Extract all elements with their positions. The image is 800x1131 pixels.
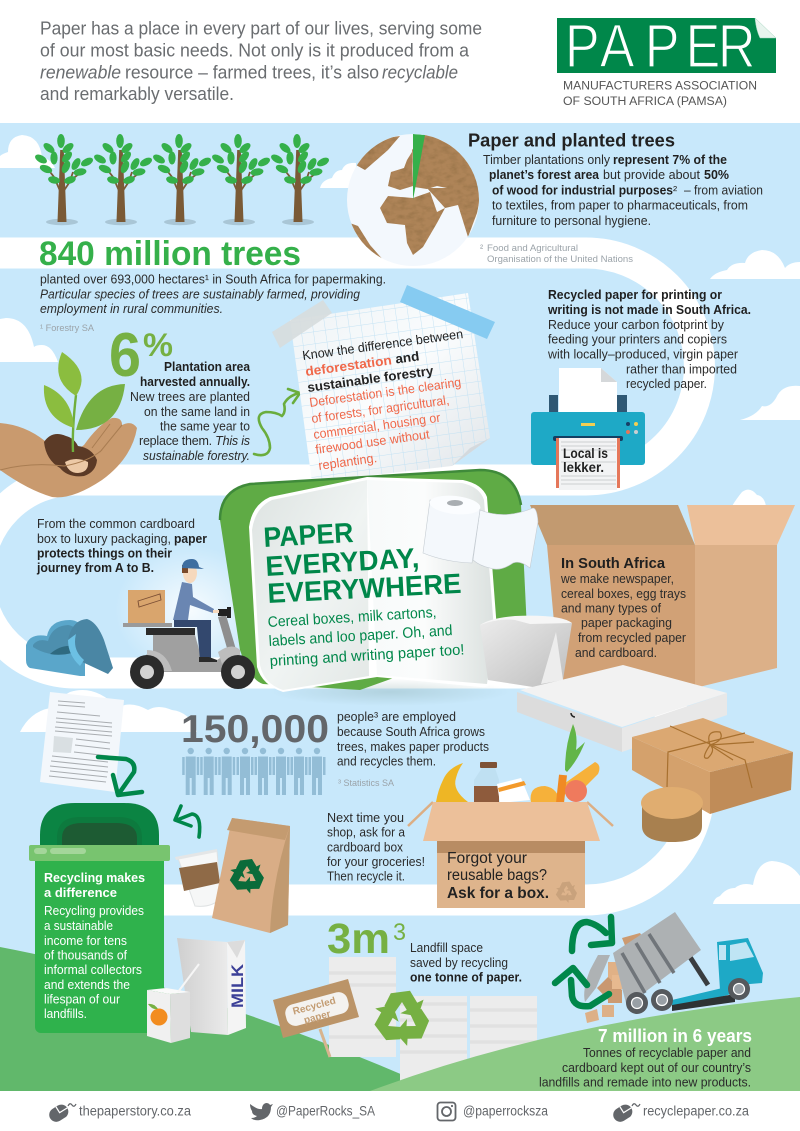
icon: paper bag bbox=[212, 818, 290, 933]
text: recycling makes a difference: a difference bbox=[44, 885, 117, 900]
intro text: of our most basic needs. Not only is it produced from a bbox=[40, 40, 470, 60]
parcel bbox=[128, 590, 165, 623]
text: people employed bbox=[337, 710, 489, 768]
heading: paper everyday everywhere: EVERYWHERE bbox=[267, 568, 462, 609]
text: recycling makes a difference: landfills. bbox=[44, 1007, 87, 1021]
text: landfill space: one tonne of paper. bbox=[410, 970, 522, 984]
icon: document bbox=[40, 692, 124, 792]
text: recycled paper for printing: with locally–produced, virgin paper bbox=[547, 348, 738, 362]
text: know the difference: replanting. bbox=[317, 450, 378, 473]
text: planted hectares bbox=[40, 272, 386, 316]
hill: right bbox=[370, 997, 800, 1091]
hill: left bbox=[0, 947, 440, 1091]
text: recycling makes a difference: informal collectors bbox=[44, 963, 142, 977]
icon: recycled paper sign: Recycled bbox=[292, 996, 337, 1018]
text: plantation area: harvested annually. bbox=[140, 375, 250, 389]
footer: twitter bbox=[250, 1103, 375, 1120]
text: tonnes of recyclable paper: Tonnes of recyclable paper and bbox=[583, 1046, 751, 1060]
white winding road bbox=[0, 253, 699, 900]
stat: 6 percent bbox=[109, 321, 173, 390]
text: next time you shop bbox=[327, 811, 425, 884]
stat: 6 percent: % bbox=[143, 327, 173, 363]
text: cereal boxes: labels and loo paper. Oh, and bbox=[268, 622, 453, 650]
intro text: recyclable bbox=[382, 62, 458, 82]
text: recycling makes a difference: income for tens bbox=[44, 934, 127, 948]
globe bbox=[347, 132, 482, 266]
text: recycling makes a difference: Recycling makes bbox=[44, 870, 145, 885]
text: in south africa: paper packaging bbox=[581, 616, 672, 630]
tree row bbox=[34, 134, 330, 225]
text: common cardboard box: From the common cardboard bbox=[37, 517, 195, 531]
text: next time you shop: shop, ask for a bbox=[327, 826, 405, 840]
text: planted hectares: Particular species of trees are sustainably farmed, providing bbox=[40, 288, 360, 302]
text: next time you shop: for your groceries! bbox=[327, 855, 425, 869]
text: landfill space: saved by recycling bbox=[410, 956, 508, 970]
text: planted hectares: planted over 693,000 hectares¹ in South Africa for papermaking. bbox=[40, 272, 386, 286]
text: timber plantations: planet’s forest area bbox=[489, 168, 600, 182]
text: forgot your bags: reusable bags? bbox=[447, 867, 547, 884]
text: planted hectares: employment in rural communities. bbox=[40, 302, 223, 316]
text: tonnes of recyclable paper: cardboard kept out of our country’s bbox=[562, 1061, 751, 1075]
footer: instagram: @paperrocksza bbox=[463, 1104, 548, 1118]
icon: people row bbox=[182, 748, 326, 795]
text: local is lekker bbox=[563, 445, 608, 475]
footer: website two: recyclepaper.co.za bbox=[643, 1104, 749, 1118]
logo: PAMSA: PAPER bbox=[565, 12, 755, 80]
text: know the difference: and bbox=[394, 348, 420, 366]
logo: PAMSA: OF SOUTH AFRICA (PAMSA) bbox=[563, 96, 727, 108]
text: know the difference: sustainable forestry bbox=[306, 363, 435, 395]
footer: website one: thepaperstory.co.za bbox=[79, 1104, 191, 1118]
centre panel: paper everyday everywhere bbox=[220, 470, 527, 692]
text: know the difference: Deforestation is the clearing bbox=[308, 374, 462, 410]
logo: PAMSA bbox=[557, 12, 776, 108]
text: in south africa: from recycled paper bbox=[578, 631, 686, 645]
icon: seedling in hand bbox=[0, 352, 137, 497]
text: recycled paper for printing: feeding your printers and copiers bbox=[548, 332, 727, 346]
text: people employed: trees, makes paper products bbox=[337, 740, 489, 754]
text: in south africa bbox=[560, 556, 686, 660]
icon: juice carton bbox=[147, 964, 199, 1043]
text: in south africa: In South Africa bbox=[561, 556, 666, 572]
text: forgot your bags: Forgot your bbox=[447, 850, 527, 867]
text: cereal boxes bbox=[267, 604, 465, 670]
text: know the difference: deforestation bbox=[304, 352, 393, 379]
text: in south africa: we make newspaper, bbox=[560, 572, 674, 586]
intro text: Paper has a place in every part of our lives, serving some bbox=[40, 18, 482, 38]
rider bbox=[173, 559, 219, 662]
text: forgot your bags: Ask for a box. bbox=[447, 885, 549, 902]
text: timber plantations: ² bbox=[673, 184, 677, 198]
text: recycled paper for printing: recycled paper. bbox=[626, 377, 707, 391]
heading: paper everyday everywhere: PAPER bbox=[263, 517, 354, 553]
text: landfill space bbox=[410, 941, 522, 984]
text: people employed: and recycles them. bbox=[337, 754, 436, 768]
text: landfill space: Landfill space bbox=[410, 941, 483, 955]
notebook page bbox=[272, 285, 495, 482]
icon: round box bbox=[641, 787, 703, 842]
text: timber plantations: 50% bbox=[704, 168, 729, 182]
text: know the difference bbox=[301, 326, 464, 473]
footer: website two bbox=[611, 1102, 749, 1124]
text: recycled paper for printing bbox=[547, 288, 751, 391]
text: recycled paper for printing: Reduce your carbon footprint by bbox=[548, 318, 725, 332]
text: cereal boxes: printing and writing paper too! bbox=[269, 641, 465, 670]
text: know the difference: Know the difference between bbox=[301, 326, 464, 363]
icon: coffee cup bbox=[175, 849, 221, 906]
icon: groceries bbox=[436, 724, 599, 803]
footnote 3: ³ Statistics SA bbox=[338, 778, 395, 789]
text: tonnes of recyclable paper: landfills and remade into new products. bbox=[539, 1076, 751, 1090]
text: next time you shop: Next time you bbox=[327, 811, 404, 825]
debris boxes bbox=[585, 933, 648, 1023]
icon: big cardboard box bbox=[530, 505, 795, 688]
text: plantation area: New trees are planted bbox=[130, 390, 250, 404]
text: timber plantations: but provide about bbox=[603, 168, 701, 182]
icon: milk carton: MILK bbox=[228, 963, 247, 1008]
intro text: and remarkably versatile. bbox=[40, 84, 234, 104]
panel: recycling bin bbox=[29, 803, 170, 1033]
icon: takeaway box bbox=[480, 616, 572, 687]
text: recycled paper for printing: writing is not made in South Africa. bbox=[547, 303, 751, 317]
footer: twitter: @PaperRocks_SA bbox=[276, 1104, 375, 1118]
text: common cardboard box: journey from A to B. bbox=[36, 561, 154, 575]
logo: PAMSA: MANUFACTURERS ASSOCIATION bbox=[563, 80, 757, 92]
text: plantation area: replace them. This is bbox=[139, 434, 250, 448]
text: recycling makes a difference: of thousands of bbox=[44, 948, 128, 962]
icon: heart box bbox=[26, 619, 113, 676]
text: plantation area bbox=[130, 360, 251, 463]
footer: website one bbox=[47, 1102, 191, 1124]
icon: toilet roll bbox=[423, 493, 538, 569]
stat: 150,000: 150,000 bbox=[181, 708, 329, 751]
text: know the difference: firewood use without bbox=[314, 426, 431, 457]
icon: paper stacks bbox=[329, 957, 537, 1091]
icon: pizza box bbox=[517, 665, 727, 752]
text: plantation area: sustainable forestry. bbox=[143, 449, 250, 463]
arrow: document to bin bbox=[98, 757, 142, 795]
text: recycling makes a difference bbox=[44, 870, 145, 1021]
footnote 2: Organisation of the United Nations bbox=[487, 254, 633, 265]
stat: 7 million in 6 years: 7 million in 6 years bbox=[598, 1026, 752, 1046]
arrow: squiggle to notebook bbox=[254, 389, 300, 455]
text: next time you shop: Then recycle it. bbox=[327, 870, 405, 884]
shadow under centre panel bbox=[270, 678, 510, 706]
text: know the difference: commercial, housing or bbox=[312, 410, 442, 442]
intro text: renewable bbox=[40, 62, 121, 82]
clouds bbox=[0, 135, 800, 904]
footnote 2 bbox=[480, 243, 633, 265]
text: recycling makes a difference: a sustainable bbox=[44, 919, 113, 933]
text: know the difference: of forests, for agricultural, bbox=[310, 392, 450, 426]
text: timber plantations: – from aviation bbox=[684, 184, 763, 198]
text: people employed: because South Africa grows bbox=[337, 725, 485, 739]
icon: milk carton bbox=[177, 938, 247, 1035]
arrow: bag to bin bbox=[175, 806, 200, 837]
tape: blue bbox=[400, 285, 495, 339]
stat: 3 cubic metres: 3m bbox=[327, 915, 390, 963]
text: timber plantations: represent 7% of the bbox=[613, 153, 727, 167]
stat: 3 cubic metres: 3 bbox=[393, 919, 406, 946]
text: timber plantations: to textiles, from paper to pharmaceuticals, from bbox=[492, 198, 748, 212]
icon: recycle symbol large bbox=[368, 991, 434, 1050]
text: recycling makes a difference: Recycling provides bbox=[44, 904, 144, 918]
footnote 2: ² bbox=[480, 243, 483, 254]
text: timber plantations: furniture to personal hygiene. bbox=[492, 214, 651, 228]
heading: paper and planted trees: Paper and planted trees bbox=[468, 130, 675, 150]
footnote 2: Food and Agricultural bbox=[487, 243, 578, 254]
text: recycled paper for printing: rather than imported bbox=[626, 362, 737, 376]
text: tonnes of recyclable paper bbox=[539, 1046, 751, 1090]
text: recycled paper for printing: Recycled paper for printing or bbox=[548, 288, 722, 302]
text: timber plantations bbox=[483, 153, 763, 228]
intro text: resource – farmed trees, it’s also bbox=[125, 62, 379, 82]
text: common cardboard box: box to luxury packaging, bbox=[37, 532, 171, 546]
icon: gift box bbox=[632, 718, 793, 814]
stat: 840 million trees: 840 million trees bbox=[39, 235, 301, 273]
icon: grocery box bbox=[408, 802, 613, 908]
glow behind scooter bbox=[115, 545, 265, 675]
footer: instagram bbox=[438, 1102, 548, 1120]
text: local is lekker: Local is bbox=[563, 445, 608, 461]
icon: delivery scooter bbox=[123, 559, 255, 689]
text: in south africa: and cardboard. bbox=[575, 646, 657, 660]
text: cereal boxes: Cereal boxes, milk cartons, bbox=[267, 604, 437, 631]
text: timber plantations: Timber plantations only bbox=[483, 153, 611, 167]
text: plantation area: on the same land in bbox=[144, 405, 250, 419]
tape: grey bbox=[272, 300, 332, 348]
text: in south africa: cereal boxes, egg trays bbox=[561, 587, 686, 601]
footer band bbox=[0, 1091, 800, 1131]
intro text bbox=[40, 18, 482, 104]
text: plantation area: Plantation area bbox=[164, 360, 251, 374]
text: people employed: people³ are employed bbox=[337, 710, 456, 724]
stat: 6 percent: 6 bbox=[109, 321, 141, 390]
text: common cardboard box: protects things on their bbox=[37, 546, 172, 560]
text: recycling makes a difference: lifespan of our bbox=[44, 992, 120, 1006]
text: timber plantations: of wood for industrial purposes bbox=[492, 184, 673, 198]
text: in south africa: and many types of bbox=[561, 602, 662, 616]
heading: paper everyday everywhere bbox=[263, 517, 462, 609]
text: next time you shop: cardboard box bbox=[327, 840, 404, 854]
text: local is lekker: lekker. bbox=[563, 459, 604, 475]
icon: recycled paper sign: paper bbox=[303, 1009, 332, 1026]
footnote 1: ¹ Forestry SA bbox=[40, 323, 95, 334]
text: forgot your bags bbox=[447, 850, 549, 902]
icon: recycled paper sign bbox=[273, 979, 359, 1057]
heading: paper everyday everywhere: EVERYDAY, bbox=[265, 542, 420, 582]
text: plantation area: the same year to bbox=[160, 420, 250, 434]
text: recycling makes a difference: and extends the bbox=[44, 978, 130, 992]
icon: recycling truck bbox=[584, 912, 763, 1023]
text: common cardboard box: paper bbox=[174, 532, 207, 546]
arrows: recycling loop bbox=[555, 917, 612, 1006]
text: common cardboard box bbox=[36, 517, 207, 575]
icon: printer bbox=[531, 368, 645, 490]
